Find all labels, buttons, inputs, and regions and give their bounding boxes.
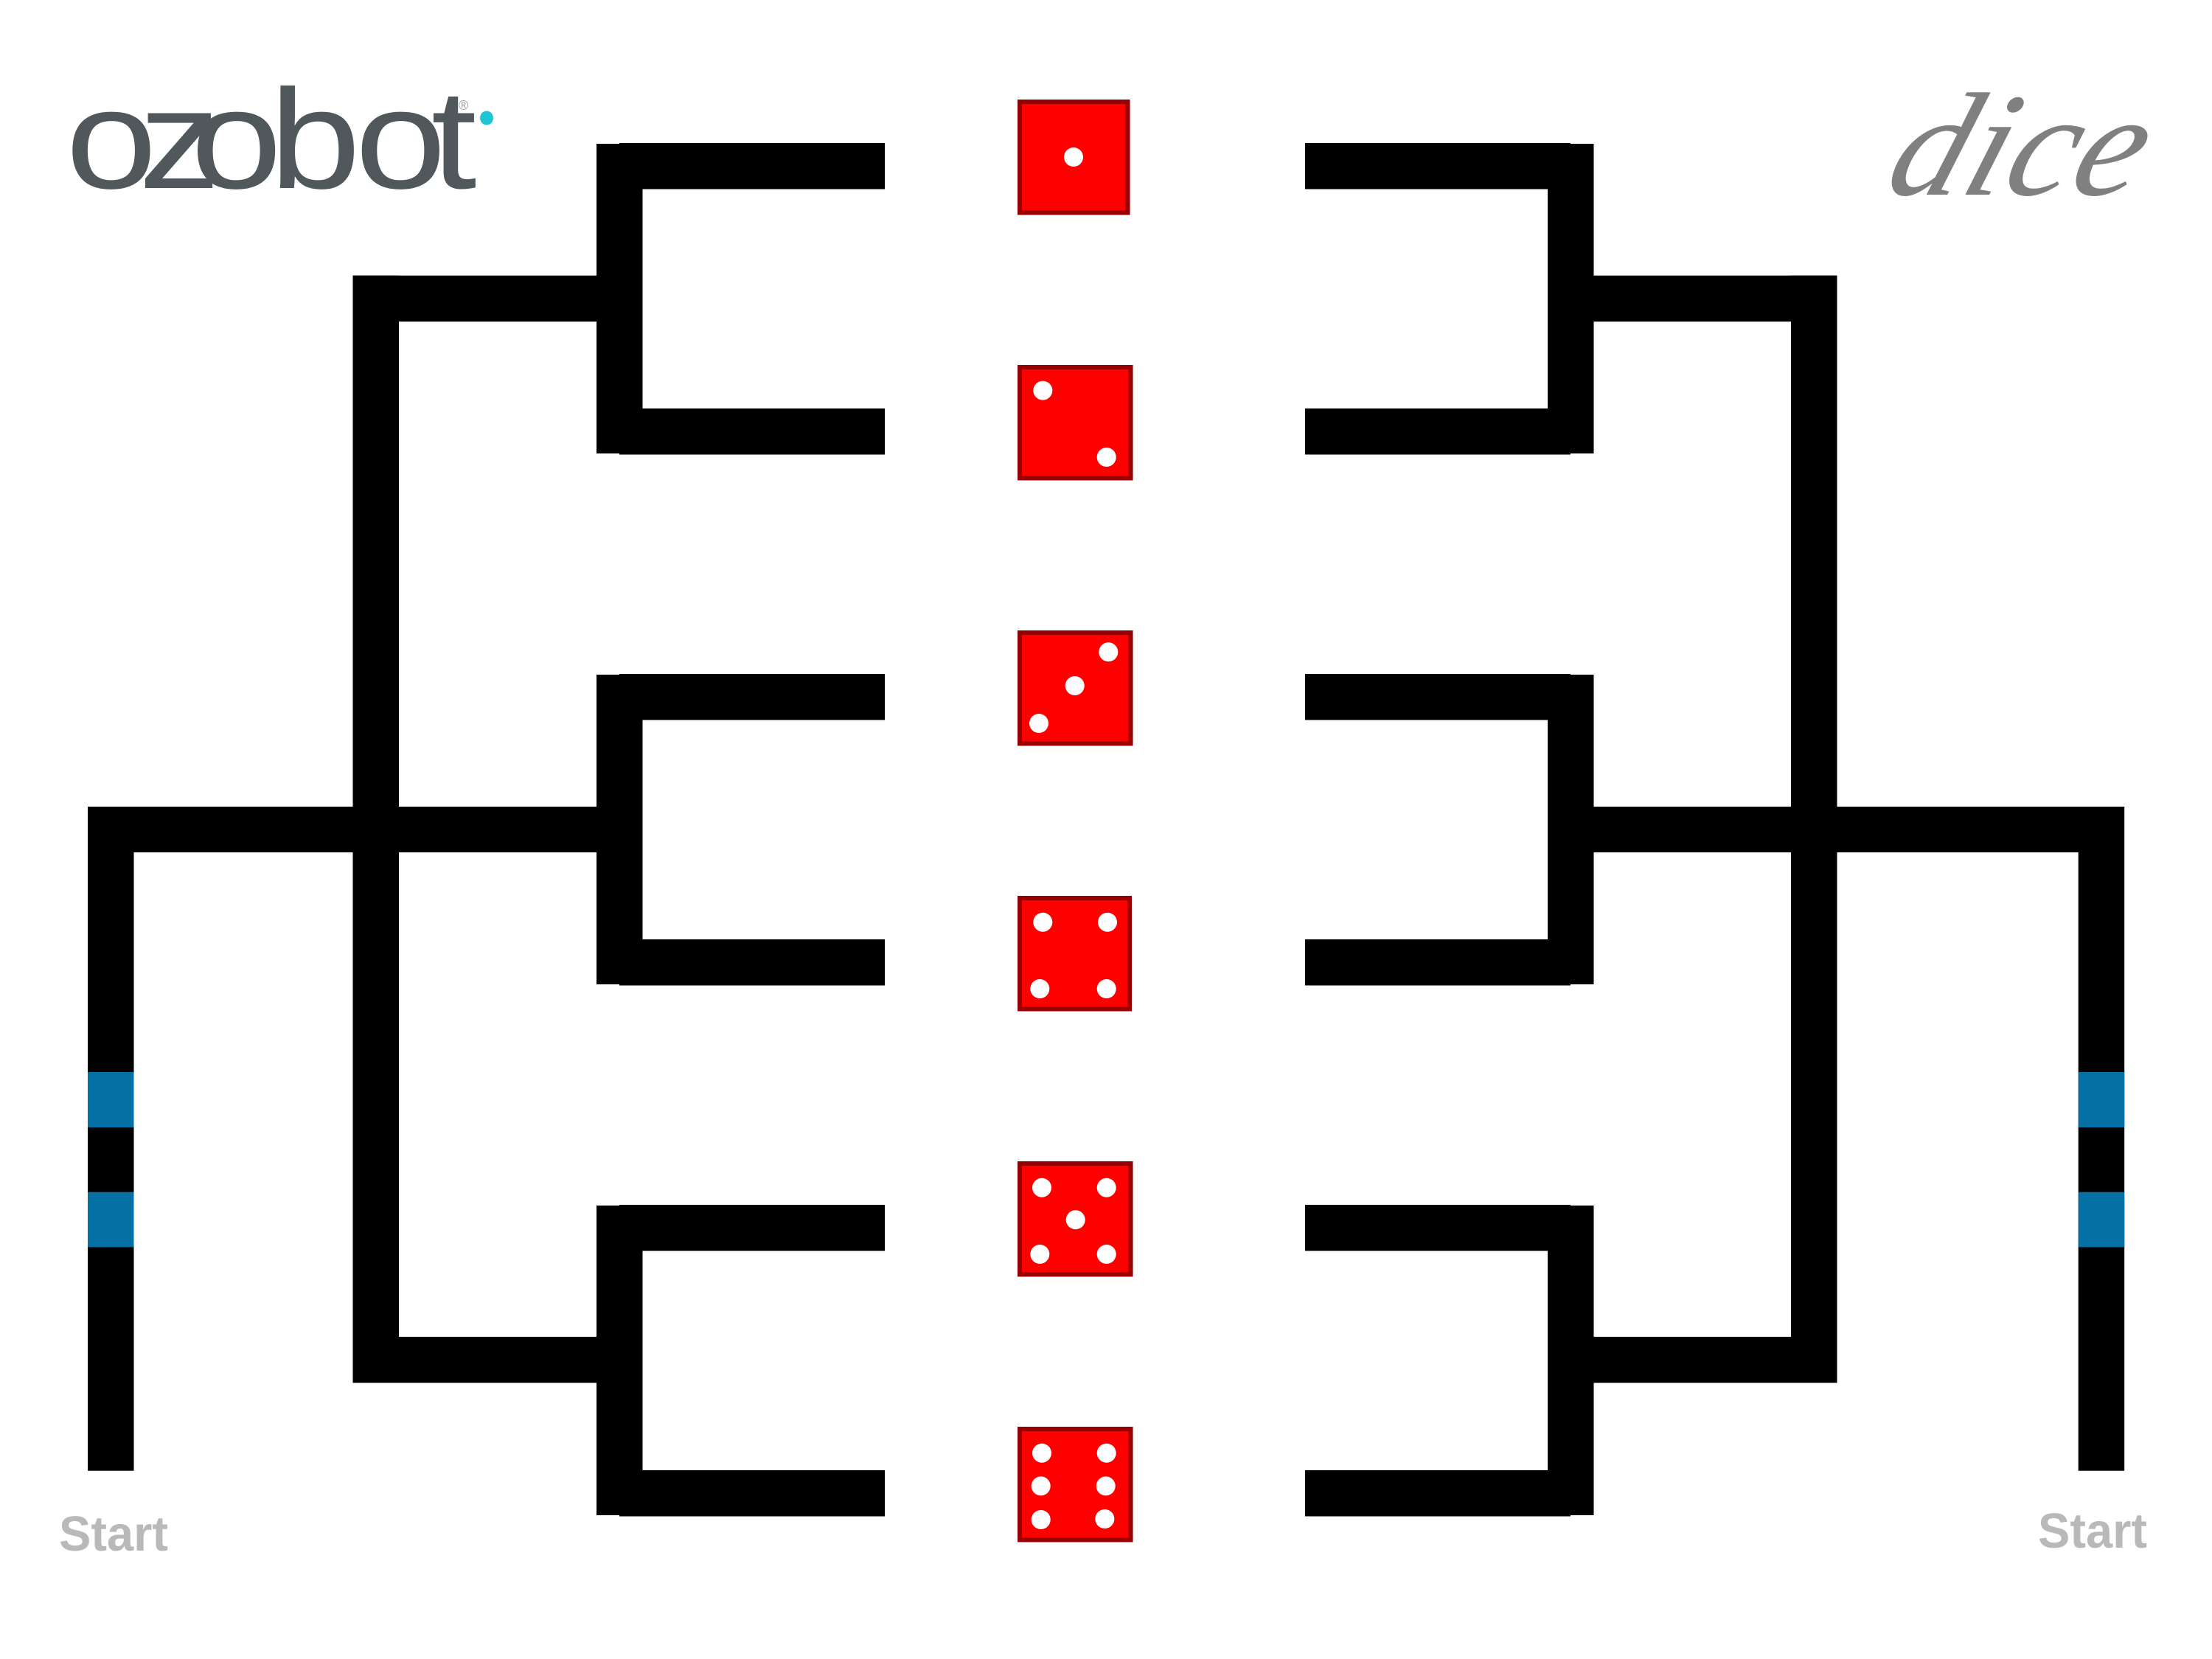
logo: dice: dice <box>1871 64 2175 227</box>
die: one <box>1020 102 1128 212</box>
right start line <box>1585 807 2124 1471</box>
logo: ozobot: ozobot <box>66 60 477 219</box>
left blue markers <box>88 1072 134 1247</box>
label: left start: Start <box>59 1506 168 1562</box>
icon: teal logo dot <box>480 111 493 125</box>
label: right start: Start <box>2038 1503 2147 1559</box>
registered mark: ® <box>459 98 468 113</box>
right bracket 3 <box>1305 1205 1594 1516</box>
die: two <box>1020 367 1131 478</box>
left bracket 1 <box>597 143 885 454</box>
left start line <box>88 807 604 1471</box>
left trunk <box>352 276 603 1383</box>
left bracket 3 <box>597 1205 885 1516</box>
left track <box>88 143 885 1516</box>
die: six <box>1020 1429 1131 1540</box>
right blue markers <box>2079 1072 2124 1247</box>
die: five <box>1020 1164 1131 1274</box>
right track <box>1305 143 2124 1516</box>
right bracket 2 <box>1305 674 1594 985</box>
right trunk <box>1585 276 1837 1383</box>
left bracket 2 <box>597 674 885 985</box>
right bracket 1 <box>1305 143 1594 454</box>
die: four <box>1020 898 1130 1009</box>
die: three <box>1020 633 1131 743</box>
